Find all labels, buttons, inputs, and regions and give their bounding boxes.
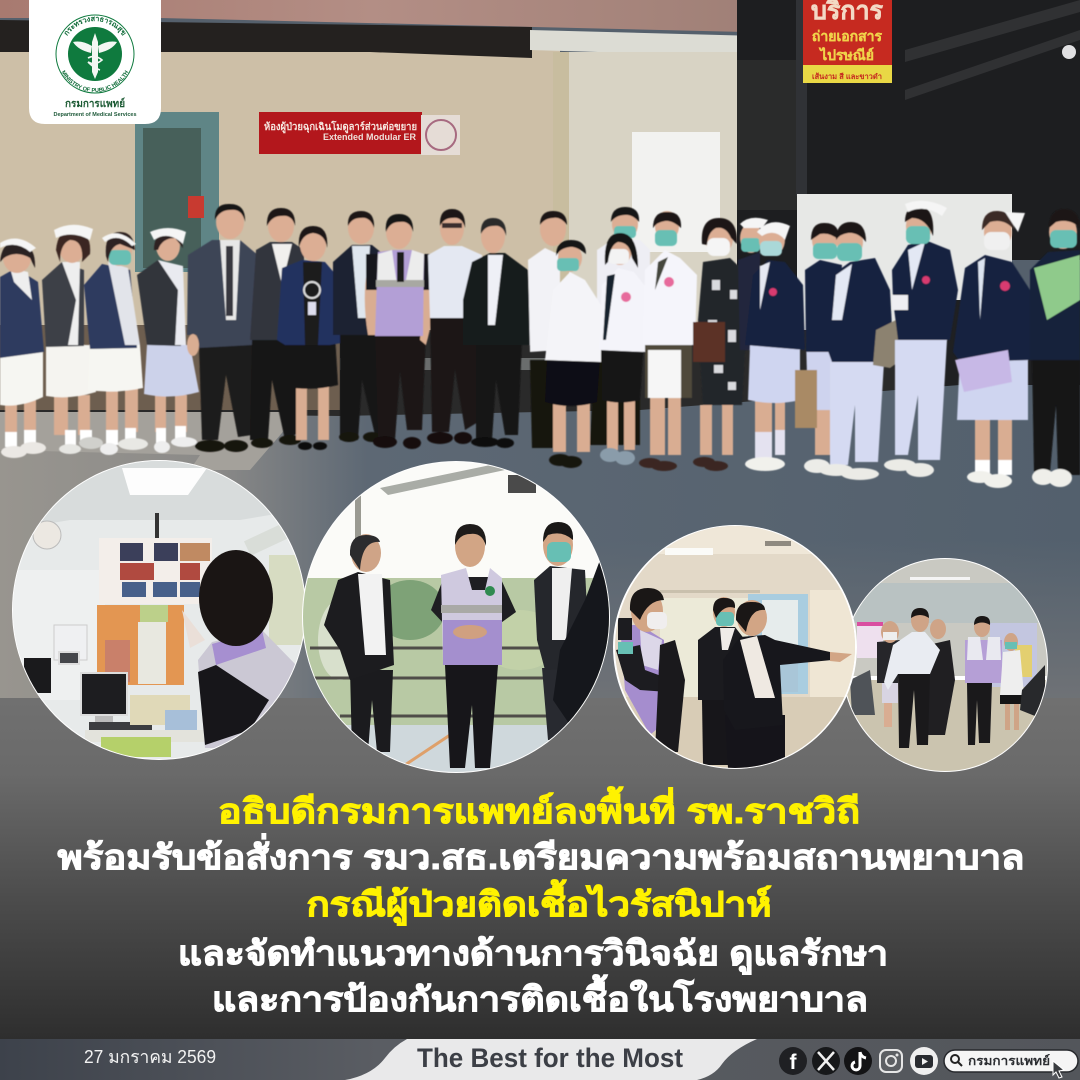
white fascia: [530, 30, 797, 58]
man 14 behind with mask: [590, 207, 650, 445]
red sign Extended Modular ER: ห้องผู้ป่วยฉุกเฉินโมดูลาร์ส่วนต่อขยาย: [264, 120, 417, 134]
dark fascia: [0, 20, 532, 58]
woman 7 navy blazer: [277, 226, 347, 450]
headline line 2: พร้อมรับข้อสั่งการ รมว.สธ.เตรียมความพร้อมสถานพยาบาล: [58, 833, 1024, 877]
man with mask: [698, 597, 745, 765]
man in white shirt: [898, 673, 930, 748]
icon: facebook: [779, 1047, 807, 1075]
seated people and nurse: [850, 670, 875, 715]
headline line 1: อธิบดีกรมการแพทย์ลงพื้นที่ รพ.ราชวิถี: [218, 786, 860, 831]
headline line 5: และการป้องกันการติดเชื้อในโรงพยาบาล: [212, 974, 868, 1019]
headline text block: [58, 786, 1024, 1019]
right man with mask: [534, 522, 590, 740]
blue door: [748, 594, 808, 694]
corrugated roof: [0, 0, 745, 32]
road: [0, 385, 1080, 710]
nurse 1: [0, 239, 46, 458]
beige container wall: [0, 50, 560, 410]
icon: X: [812, 1047, 840, 1075]
circle photo 2: balcony talk: [300, 458, 615, 780]
circle photo 4: hospital walk: [840, 556, 1050, 780]
front pointing man: [723, 600, 852, 768]
icon: facebook: f: [790, 1051, 798, 1074]
man 10 light shirt: [427, 209, 482, 444]
man in vest: [967, 683, 992, 745]
green counter: [101, 737, 171, 757]
icon: youtube: [910, 1047, 938, 1075]
orange window: [97, 605, 184, 685]
department name Thai: กรมการแพทย์: [65, 97, 125, 110]
woman: [1000, 650, 1024, 695]
headline line 4: และจัดทำแนวทางด้านการวินิจฉัย ดูแลรักษา: [178, 935, 888, 975]
search pill: กรมการแพทย์: [968, 1054, 1050, 1068]
red sign Extended Modular ER: [259, 112, 460, 155]
foreground dark person: [553, 560, 612, 725]
woman 15 white coat: [599, 233, 648, 465]
man 9 purple vest: [365, 214, 434, 449]
headline line 3: กรณีผู้ป่วยติดเชื้อไวรัสนิปาห์: [306, 879, 772, 926]
footer bar: [0, 1039, 1080, 1080]
person with purple vest: [182, 550, 296, 748]
left man: [324, 534, 394, 752]
man behind: [928, 640, 955, 735]
staff 24 with green folder: [1030, 209, 1080, 487]
red service banner: ถ่ายเอกสาร: [812, 28, 883, 44]
man 5 gray blazer: [187, 204, 267, 452]
computer monitor: [81, 673, 152, 730]
man 8 dark suit: [333, 211, 388, 442]
nurse 22 lavender pants: [884, 201, 958, 477]
light slogan band: [345, 1039, 757, 1080]
circle photo 1: monitor room: [10, 458, 310, 763]
ministry emblem: กระทรวงสาธารณสุข: [64, 16, 126, 36]
dark warehouse: [737, 0, 1080, 400]
red service banner: เส้นงาม สี และขาวดำ: [812, 72, 882, 81]
man 6 glasses: [250, 208, 304, 448]
light extension wall: [553, 52, 737, 402]
nurse 4: [137, 228, 199, 453]
man 11 black suit: [463, 218, 531, 448]
ministry emblem: [56, 14, 134, 94]
date: 27 มกราคม 2569: [84, 1047, 216, 1067]
white door: [632, 132, 720, 252]
white board: [797, 194, 1012, 349]
nurse 2: [42, 225, 103, 454]
man 12 white coat: [528, 211, 567, 448]
nurse 20 behind: [795, 223, 845, 473]
railings: [310, 648, 550, 716]
nurse 3 with mask: [84, 232, 148, 455]
nurse 21 lavender pants with bag: [819, 222, 915, 480]
red service banner: [803, 0, 892, 83]
wall monitor: [99, 538, 212, 604]
woman 17 patterned dress: [693, 218, 748, 471]
icon: tiktok: [844, 1047, 872, 1075]
logo panel: [29, 0, 161, 124]
search pill: [944, 1050, 1078, 1078]
department name English: Department of Medical Services: [54, 112, 136, 118]
group photo of staff: [0, 201, 1080, 488]
red sign Extended Modular ER: Extended Modular ER: [323, 132, 416, 142]
teal door: [135, 112, 219, 272]
left man in vest: [616, 588, 672, 735]
bottom gradient panel: [0, 540, 1080, 1040]
woman 16 white coat with paper: [639, 211, 697, 471]
nurse 18 behind: [738, 218, 768, 350]
red service banner: ไปรษณีย์: [818, 46, 874, 63]
nurse 19 lavender skirt: [745, 222, 805, 471]
icon: instagram: [880, 1050, 902, 1072]
center man in purple vest: [431, 524, 516, 768]
right window: [269, 555, 304, 645]
nurse 23 with folder: [953, 211, 1030, 488]
ministry emblem: MINISTRY OF PUBLIC HEALTH: [62, 70, 128, 92]
steps under container: [0, 330, 980, 420]
circle photo 3: pointing: [610, 524, 860, 777]
slogan: The Best for the Most: [417, 1043, 683, 1073]
woman 13 white coat: [545, 240, 601, 468]
